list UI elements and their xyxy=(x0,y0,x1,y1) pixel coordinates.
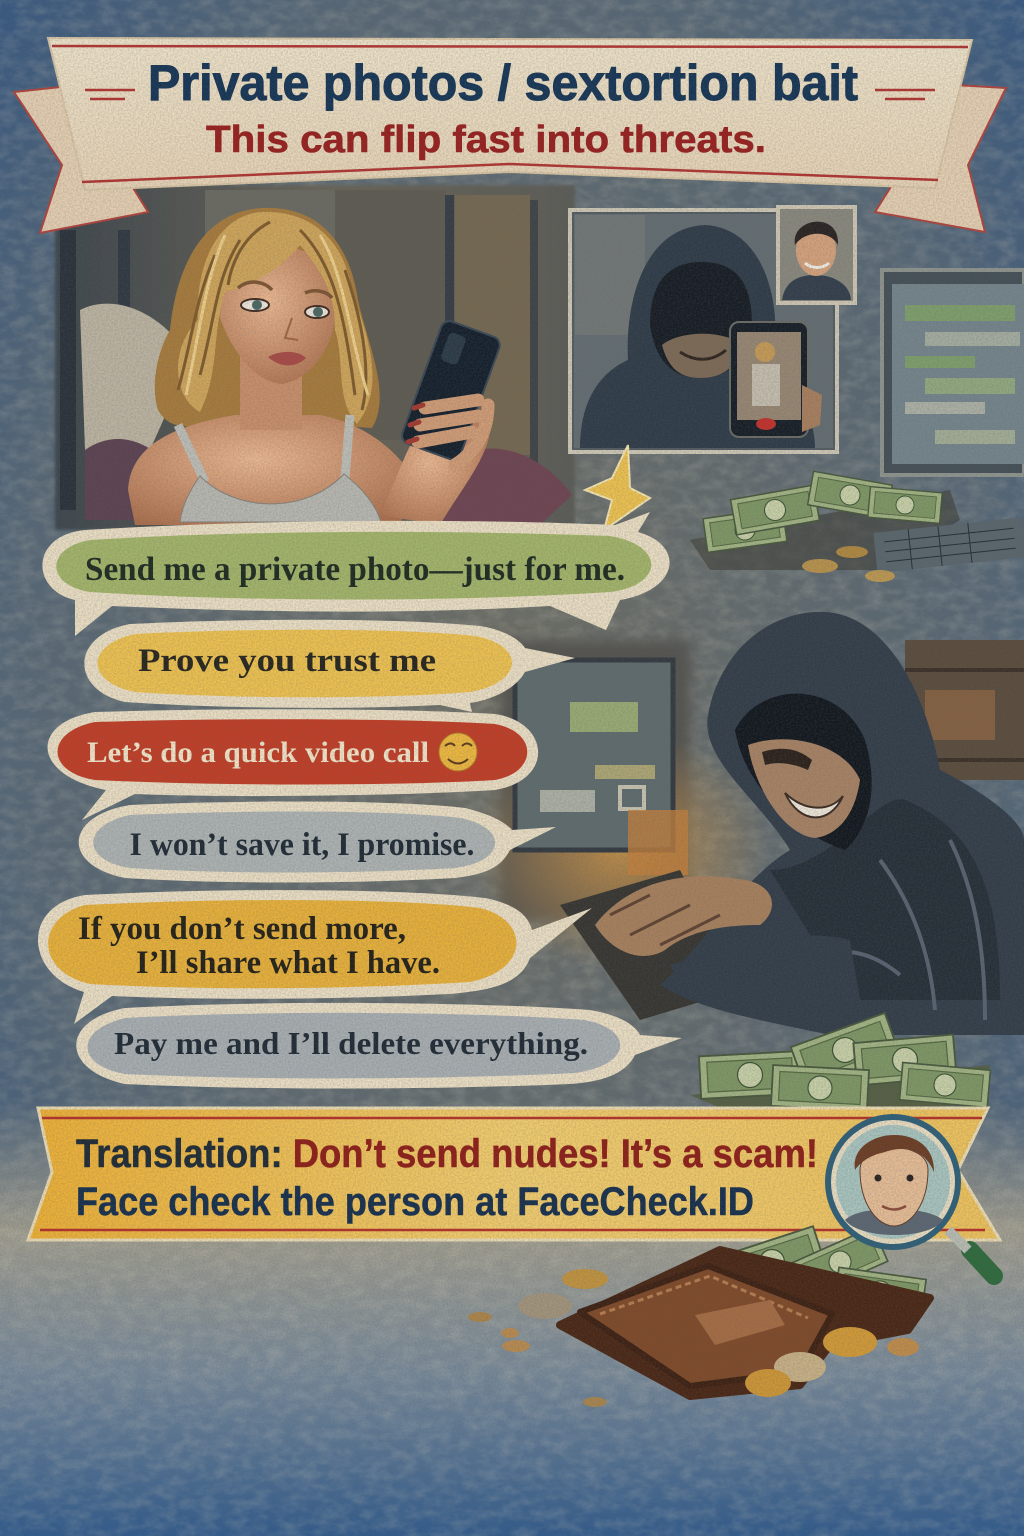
face xyxy=(748,739,860,838)
shoulders and chest xyxy=(128,415,415,525)
body xyxy=(660,612,1024,1035)
hair front xyxy=(178,212,372,424)
arm xyxy=(380,420,490,525)
bubble 3: Let’s do a quick video call xyxy=(87,736,429,769)
heading: Private photos / sextortion bait xyxy=(148,55,858,111)
left ribbon tail xyxy=(14,86,148,233)
eyes xyxy=(241,299,269,311)
hooded figure xyxy=(580,225,815,448)
phone in video xyxy=(730,322,808,437)
banner body xyxy=(48,38,972,190)
icon: smiling emoji xyxy=(439,733,477,771)
video call window xyxy=(570,207,855,452)
title banner xyxy=(14,38,1006,233)
callout text line 2: Face check the person at FaceCheck.ID xyxy=(76,1180,754,1224)
bubble 3 xyxy=(48,709,538,820)
nose and mouth xyxy=(285,318,298,340)
bubble 4 xyxy=(79,802,556,882)
bubble 2: Prove you trust me xyxy=(138,643,436,679)
bubble 1 xyxy=(42,512,670,636)
hooded scammer at computer xyxy=(470,612,1024,1035)
wallet with cash and coins xyxy=(468,1226,930,1407)
bubble 5 xyxy=(38,890,592,1024)
right ribbon tail xyxy=(875,85,1006,232)
neck xyxy=(240,350,302,430)
bubble 4: I won’t save it, I promise. xyxy=(130,827,474,863)
shelves behind xyxy=(905,640,1024,780)
scene: bedroom with woman on phone xyxy=(55,185,575,530)
hands xyxy=(595,876,772,956)
hair back xyxy=(155,208,380,428)
monitor behind xyxy=(515,660,673,850)
inset portrait xyxy=(778,207,855,303)
woman xyxy=(128,208,502,525)
bubble 5: If you don’t send more, xyxy=(78,911,406,947)
glowing stacks xyxy=(628,810,688,875)
bubble 6: Pay me and I’ll delete everything. xyxy=(114,1025,588,1061)
hood inner xyxy=(735,694,872,850)
callout text line 1: Translation: Don’t send nudes! It’s a scam! xyxy=(76,1132,818,1176)
subheading: This can flip fast into threats. xyxy=(206,119,766,161)
keyboard xyxy=(560,870,740,1020)
hand xyxy=(418,400,488,465)
face xyxy=(212,246,338,384)
bubble 1: Send me a private photo—just for me. xyxy=(85,551,625,588)
translation banner xyxy=(28,1108,1000,1240)
bubble 2 xyxy=(84,620,575,712)
monitor with chat xyxy=(882,270,1024,475)
phone xyxy=(400,319,502,462)
bubble 5: I’ll share what I have. xyxy=(136,945,440,981)
bubble 6 xyxy=(76,1003,682,1088)
bed pillows xyxy=(80,304,190,450)
icon: magnifying glass with face xyxy=(828,1117,994,1276)
lightning spark xyxy=(585,445,650,530)
cash stack xyxy=(690,1013,990,1112)
cash pile on desk xyxy=(690,471,1024,582)
tank top xyxy=(178,415,350,482)
